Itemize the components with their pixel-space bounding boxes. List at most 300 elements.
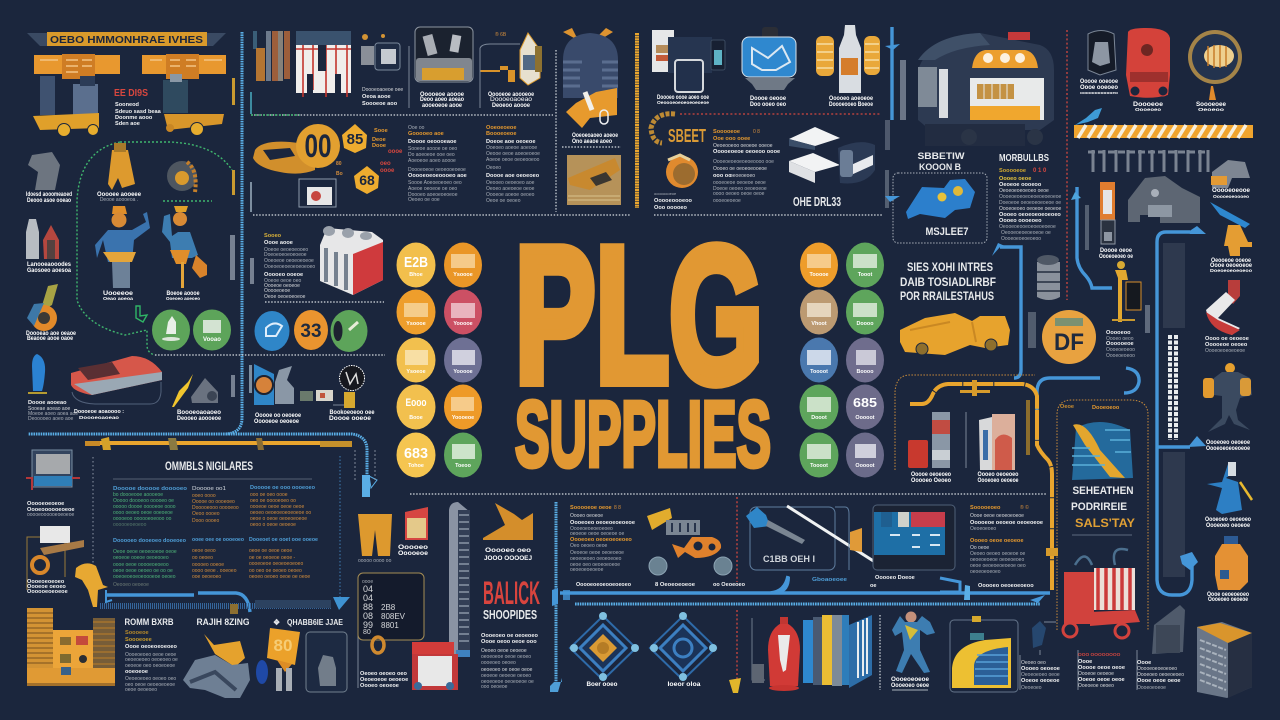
bottom centre text and parts: oeoeoeoeo oeoeoeoeo: [570, 556, 622, 562]
icon: worker with bags: [1225, 363, 1235, 373]
icon: bottle and cone: [26, 219, 39, 259]
central circles right: Ooooot: [855, 415, 875, 421]
text columns top middle: Ooeoeoeoe: [486, 125, 516, 131]
right top icons: oooooooooooeo: [1080, 90, 1119, 95]
heading text beneath truck: KOOON B: [919, 162, 961, 173]
line dividers: [409, 44, 520, 108]
icon: server block: [1197, 622, 1252, 698]
bulk supplies heading: oooeoeo oeoeo: [481, 660, 516, 666]
central circles left: Yoooeoe: [452, 415, 474, 421]
blue bird and hazard bar: [1074, 108, 1253, 138]
icon: canister and tag: ® 6B: [495, 31, 507, 38]
text columns top middle: Sooeoe aoooe oe oeo: [408, 146, 457, 152]
text: BALICK: [483, 575, 540, 611]
sheet panel: Doeoe oeoeo oeoeoeoe: [713, 186, 767, 192]
mid left text and machine: Ooeoeoe oeoeoeoeoe: [264, 258, 314, 264]
panel: omnibus notes: Dooooe oo1: [192, 486, 226, 492]
bottle and striped cylinders: Ooooeo aoeoeoe: [829, 96, 874, 102]
panel: omnibus notes: oo oeo oe oeoeo oeoeo: [249, 568, 302, 574]
bottom centre text and parts: [550, 505, 746, 692]
right middle products: Ooooe oeoeoeo: [911, 472, 951, 478]
yellow link icon group: 85: [347, 131, 363, 148]
central circles left: Booe: [409, 415, 423, 421]
bulk supplies heading: SHOOPIDES: [483, 607, 537, 622]
vest and shop near bottom center left: 8801: [381, 621, 399, 630]
big tank and orange bag: [563, 28, 621, 205]
icon: engine: [28, 152, 60, 190]
panel: omnibus notes: oeoeo oeoeoeoeoeoeoe oo: [250, 510, 311, 516]
title: SUPPLIES: [515, 382, 771, 486]
vest and gear icons: Deooe aoooeoa .: [100, 197, 138, 203]
mid left text and machine: Ooooeoeoe: [264, 288, 290, 294]
slogan and yellow car: SIES XOHI INTRES: [907, 262, 993, 274]
gray data columns: [885, 44, 1206, 577]
panel: omnibus notes: ooee oee oe oooeoeo: [192, 537, 245, 543]
far right items: Oooe oeoeoeoeo: [1207, 592, 1249, 598]
bottom right items: Ooeoe oeoe oeoe: [1078, 677, 1125, 683]
red stat text block: EE DI9S: [114, 88, 148, 99]
text beside tablet: oeoe oeoeoeoeoeoe oeo: [970, 563, 1026, 569]
sales panel: SALS'TAY: [1075, 516, 1135, 530]
tank, DF badge, side text: DF: [1054, 329, 1084, 356]
right machinery column: Oooooeoe: [1106, 341, 1134, 347]
icon: small cards: [361, 34, 400, 70]
icon: black case: [1088, 30, 1116, 75]
sales panel: [1060, 404, 1140, 638]
right machinery column: Oooo oe oeoeoe: [1205, 336, 1249, 342]
central circles right: Toooot: [810, 463, 828, 469]
panel: omnibus notes: oooe oeoe ooooeoeoeoo: [113, 562, 169, 568]
sheet panel: Ooooeoooeoo: [654, 198, 692, 204]
icon: blue fan and orange chair: [1210, 202, 1250, 228]
right top icons: Oeoeoo: [1198, 107, 1224, 112]
right top icons: Oooe ooeoeo: [1080, 85, 1118, 91]
icon: orange bottle: [1224, 536, 1238, 544]
orange server and text: [27, 608, 178, 693]
far right items: Oooeoeo oeoeoe: [1208, 597, 1249, 603]
bottom right items: Oooeo oeoeoe: [1021, 666, 1060, 672]
left column parts: [26, 152, 78, 422]
vest and shop near bottom center left: 80: [363, 629, 371, 636]
central circles left: Yooooe: [453, 369, 473, 375]
text columns top middle: Aoeoeoe aoeo aoooe: [408, 158, 456, 164]
panel: omnibus notes: Dooooeo dooeoeo dooeoeo: [113, 538, 187, 544]
right top icons: Oooeoeo: [1135, 107, 1161, 112]
bottom right items: Ooooe oeoe oeoe: [1078, 665, 1125, 671]
top row products: Deoeoo aoooe: [492, 103, 531, 109]
bottom right items: Oeoeoeoeo oeoe: [1021, 672, 1060, 678]
boot: [183, 617, 268, 698]
mid left text and machine: [264, 226, 383, 300]
left column parts: Doooe aooeao: [28, 400, 67, 406]
icon: gear: [167, 161, 197, 191]
bottom centre text and parts: Oeo oeoeo oeoe: [570, 543, 607, 549]
bulk supplies heading: JOOO OOOOEJ: [484, 555, 532, 562]
yellow link icon group: oeo: [380, 161, 391, 167]
heading text beneath truck: Oeooeoeooeoeoeoeoeoe: [999, 224, 1056, 230]
panel: omnibus notes: Dooo oooeo: [192, 518, 219, 524]
orange sign and frame: ❖: [273, 618, 280, 627]
vest and shop near bottom center left: 808EV: [381, 612, 406, 621]
text columns top middle: [408, 125, 540, 204]
text columns top middle: Doooe oeoooeaoe: [408, 139, 456, 145]
sheet panel: Ooe ooo ooee: [713, 136, 750, 142]
sheet panel: [651, 114, 875, 211]
vest and shop near bottom center left: 99: [363, 620, 373, 630]
central circles left: Tohoe: [408, 463, 424, 469]
yellow link icon group: Bo: [336, 171, 343, 177]
heading text beneath truck: Oeooeoeoeoeoeoe oe: [1001, 230, 1051, 236]
right middle products: Ooooeo Oeoeo: [911, 478, 951, 484]
sheet panel: Oeoeooeoo oeoeoe ooeoe: [713, 143, 773, 149]
text columns top middle: Ooooeoeoeoooeo aoe: [408, 173, 467, 179]
icon: canister and tag: [480, 31, 542, 85]
panel: omnibus notes: ooooeo ooeoe: [192, 562, 224, 568]
lower mid icons: Bookoeoeoo oee: [330, 410, 375, 416]
card stack: Oeoooeoeoeoeoeoeoe: [657, 100, 709, 105]
hydrant and books: [729, 615, 872, 693]
text columns top middle: Oeoe oe oeoeo: [486, 198, 521, 204]
bottom centre text and parts: Oeoeoe oeoe oeoeoeoe: [570, 550, 624, 556]
bottom right items: Ooeoeoe oeoeo: [1078, 683, 1114, 689]
vest and shop near bottom center left: 04: [363, 593, 373, 603]
text columns top middle: Oeoeo: [486, 165, 501, 171]
vest and gear icons: [97, 143, 197, 203]
vest and shop near bottom center left: Oooeo oeoeoe: [360, 683, 399, 689]
rounded tool panel: [746, 506, 875, 592]
top row products: aooeoeoe aooe: [422, 103, 463, 109]
top row products: Doooeoaoeao: [490, 97, 533, 103]
heading text beneath truck: Sooooeoe: [999, 168, 1026, 174]
icon: stripe books: [253, 31, 290, 81]
mid left text and machine: Ooeoe oeoeoeooeo: [264, 247, 308, 253]
right machinery column: Oooeoeoeoo: [1106, 353, 1135, 359]
vest and shop near bottom center left: Ooooeoe: [398, 551, 429, 557]
text columns top middle: Oeooeo oeoeoeo aoe: [486, 180, 535, 186]
central circles left: Ysoeoe: [406, 369, 426, 375]
icon: red cart: [1064, 572, 1094, 624]
red stat text block: Doonme aooo: [115, 115, 153, 121]
text beside tablet: ® ©: [1020, 504, 1029, 511]
yellow link icon group: 00: [304, 128, 332, 164]
red machine and tall pipe: [412, 502, 470, 690]
rounded tool panel: C1BB OEH I: [763, 554, 815, 565]
big tank and orange bag: Ono aeaoe aoeo: [572, 139, 612, 145]
bulk supplies heading: oeoeoe oeoeoe oeoeo: [481, 673, 531, 679]
panel: omnibus notes: ooeoeoeoeoeoooeoe oeoeo: [113, 574, 176, 580]
bulk supplies heading: Oooe oeoo oeoe ooo: [481, 639, 537, 645]
panel: omnibus notes: Dooooe dooooe dooooeo: [113, 486, 188, 492]
heading text beneath truck: Oeoeoeoeoeoeo oeoe: [999, 188, 1049, 194]
left column parts: Beaooe aooe oaoe: [27, 336, 74, 342]
tablet: Ooooeo Doeoe: [875, 575, 915, 581]
panel: omnibus notes: oeoeoe ooeoe oeoeooeo: [113, 555, 169, 561]
panel: omnibus notes: ooo oe oeo oooe: [250, 492, 288, 498]
bulk supplies heading: oeoeoeoe oeoeoeoe oe: [481, 679, 534, 685]
far right items: Oooeoeo oeoeoe: [1206, 440, 1251, 446]
text columns top middle: Oeoeo oe ooe: [408, 197, 440, 203]
yellow link icon group: oooe: [380, 168, 395, 174]
text beside tablet: Oo oeoe: [970, 545, 989, 551]
bottom right items: Oooe: [1078, 659, 1092, 665]
panel: omnibus notes: Dooooe oe ooo oooeoeo: [250, 485, 316, 491]
right top icons: Soooeoee: [1196, 102, 1227, 108]
panel: omnibus notes: oeoo o oeoe oeoeoe: [250, 522, 296, 528]
icon: gray case: [1152, 605, 1185, 654]
bottom right items: Ooooeoeoeoeoeo: [1137, 666, 1177, 672]
orange bars with vehicles: [33, 54, 226, 136]
orange server and text: oeoe oeoeoeo: [125, 687, 157, 693]
rounded tool panel: Gboaoeoee: [812, 577, 847, 583]
lower mid icons: [254, 364, 375, 425]
vest and shop near bottom center left: oooe: [362, 579, 373, 585]
yellow tool: Deooeo aoooeoe: [177, 416, 222, 422]
diamonds: Boer ooeo: [586, 681, 618, 688]
sales panel: Dooeoeoo: [1092, 405, 1120, 411]
bottom left monitor and tools: [26, 450, 350, 614]
photo: [567, 155, 621, 205]
yellow tool: Boooeoaoaoeo: [177, 410, 221, 416]
icon: round shield: [1188, 30, 1242, 84]
red stat text block: Sdeuo sasd beaa: [115, 109, 162, 115]
bottom right items: Oeoeoeo: [1021, 685, 1042, 691]
panel: omnibus notes: oeoe oeoe oeoeo oe oo oe: [113, 568, 173, 574]
icon: blue and gray parts: [254, 364, 274, 405]
mid left text and machine: Oooe aooe: [264, 240, 293, 246]
circle contents: E2B: [404, 254, 428, 271]
orange server and text: Oooeoeoeo oeoe oeoe: [125, 652, 176, 658]
yellow link icon group: oooe: [388, 149, 403, 155]
icon: small tags: [300, 391, 313, 401]
far right items: [1197, 363, 1252, 698]
central circles right: Ooooot: [855, 463, 875, 469]
central circles right: Vhoot: [811, 321, 827, 327]
top row products: Ooooeoe aoooeoe: [488, 92, 535, 98]
big tank and orange bag: Ooeoeoaoeo aoeoe: [572, 133, 619, 139]
text beside tablet: Oooe oeoe oeoeoeoeoe: [970, 513, 1024, 519]
worker figures: Oeao aoeoa: [103, 296, 134, 301]
heading text beneath truck: Oooeoeoeo oeoeoe oeoeoe: [999, 206, 1062, 212]
icon: blue spoon: [32, 354, 45, 391]
bulk supplies heading: oeoeoeoe oeoe oeoeo: [481, 654, 531, 660]
icon: ring: [372, 637, 384, 653]
mid left text and machine: Sooeo: [264, 233, 282, 239]
icon: machine white red: [320, 228, 383, 295]
left column parts: Idoesd aooomeaoed: [26, 192, 72, 198]
panel: omnibus notes: oooo oeoe . ooeoeo: [192, 568, 237, 574]
bottom left monitor and tools: Oooeoeoeoeo: [27, 579, 65, 585]
bottom right items: Oooeoeo oeoeoeoeo: [1137, 672, 1184, 678]
bottom right items: Oooeoeoeoe: [891, 677, 930, 683]
right top icons: Ooooe ooeooe: [1080, 79, 1119, 85]
bottom centre text and parts: oeoe oeo oeoeoeoeoe: [570, 562, 620, 568]
bottom right items: Oooe: [1137, 660, 1151, 666]
sales panel: SEHEATHEN: [1072, 485, 1134, 497]
icon: yellow worker: [1117, 261, 1125, 269]
bottom right items: Oeoeo oeo: [1021, 660, 1046, 666]
bottom centre text and parts: 8 Oeoeoeoeoe: [655, 582, 695, 588]
text column: Sooooeoe: [713, 129, 740, 135]
vertical yellow side labels: [230, 78, 254, 397]
top row products: [253, 27, 542, 109]
panel: omnibus notes: Oeoo oooeo: [192, 511, 220, 517]
diamonds: Ioeor oloa: [668, 681, 701, 688]
heading text beneath truck: Oooeo oeoe: [999, 176, 1031, 182]
far right items: Oooeoeo oeoeoeo: [1205, 517, 1251, 523]
right middle products: Oooeoeo oeoeoe: [978, 478, 1019, 484]
panel: omnibus notes: oeoe oe oeoe oeoe: [249, 548, 292, 554]
panel: omnibus notes: Dooooeooo ooooeoo: [192, 505, 239, 511]
sheet panel: 0 8: [753, 129, 760, 135]
mid left text and machine: Oooeoe oeoeoe: [264, 283, 300, 289]
bottom centre text and parts: Oooeoeoeoeoeoeo: [570, 526, 613, 532]
panel: omnibus notes: oooeoe oeoe oeoe oeoe: [250, 504, 304, 510]
right machinery column: [1099, 160, 1253, 359]
red stat text block: Sooneod: [115, 102, 140, 108]
vest and shop near bottom center left: Oeoeoeoe oeoeoe: [360, 677, 408, 683]
central circles right: [800, 242, 884, 478]
icon: cylinder kit: [1100, 182, 1115, 220]
red book: [71, 356, 162, 420]
right machinery column: Oooe oeoeoeoe: [1210, 263, 1253, 269]
green badges: [136, 306, 231, 350]
text beside tablet: Oooeo oeoe oeoeoe: [970, 538, 1023, 544]
right machinery column: Ooooeoeooe: [1212, 188, 1251, 194]
panel: omnibus notes: oo oeoeo: [192, 555, 213, 561]
bottom right items: [891, 605, 1185, 692]
bottom centre text and parts: 8 8: [614, 505, 621, 511]
heading text beneath truck: SBBETIW: [918, 151, 965, 162]
icon: magnifier: [340, 366, 364, 390]
vest and shop near bottom center left: 08: [363, 611, 373, 621]
blue bag: Doooe oeooe: [750, 96, 787, 102]
sheet panel: SBEET: [668, 126, 706, 146]
text columns top middle: Doooeo aoeoeoeoeoe: [408, 192, 458, 198]
text beside tablet: oeoeoeoeoeo: [970, 569, 1001, 575]
bottom right items: Oooeoeoeoe: [1137, 685, 1166, 691]
sheet panel: Oooeoeoeoeoeoeoooo ooe: [713, 159, 774, 165]
bottom centre text and parts: oeoeoe oeoe oeoeoe oe: [570, 531, 624, 537]
vest and shop near bottom center left: 04: [363, 584, 373, 594]
heading text beneath truck: Oooeoeoeoeoeoo: [1001, 236, 1041, 242]
yellow link icon group: Sooe: [374, 128, 388, 134]
title: [515, 206, 771, 486]
top row products: Doooeoaoeoe oee: [362, 87, 403, 93]
mid left text and machine: Ooeoe oeoe oeo: [264, 278, 301, 284]
bulk supplies heading: Ooooeo oeo: [485, 548, 531, 554]
top left banner: OEBO HMMONHRAE IVHES: [50, 35, 203, 46]
bulk supplies heading: Oooeoeo oe oeoeoeo: [481, 633, 538, 639]
panel: omnibus notes: oeoeo oeoeo oeoe oe oeoe: [249, 574, 310, 580]
panel: omnibus notes: Dooeoet oe ooet ooe ooeoe: [249, 537, 318, 543]
panel: omnibus notes: oooeoeoe oeoeoeoeoeo: [249, 561, 303, 567]
icon: yellow nozzle: [75, 563, 108, 607]
red book: Doooeoaoeao: [79, 415, 119, 420]
text beside tablet: [940, 504, 1045, 603]
text columns top middle: Oooeoe aoeoe oeoeo: [486, 192, 535, 198]
panel: omnibus notes: Oeooeo oeoeoe: [113, 582, 149, 588]
top row products: Soooeoe aoo: [362, 101, 398, 107]
left column parts: Deooo asoe ooeao: [27, 198, 71, 204]
worker figures: [95, 206, 207, 301]
panel: omnibus notes: oeoe o oeoe oeoeoeoeoe: [250, 516, 307, 522]
bottom right items: Ooeoe oeoeoe: [1021, 678, 1060, 684]
worker figures: Uooeeoe: [103, 291, 134, 297]
bottom left monitor and tools: ooooeoooooeoeoeoe: [27, 512, 74, 518]
icon: part stack: [647, 508, 672, 530]
sheet panel: oooooooeoe: [654, 191, 677, 196]
bulk supplies heading: oeoeoeo oe oeoe oeoe: [481, 667, 533, 673]
orange server and text: Oeoeoeoeo oeoeo oeo: [125, 676, 176, 682]
central circles right: Toooot: [810, 369, 828, 375]
boot: RAJIH 8ZING: [196, 617, 250, 627]
vest and shop near bottom center left: [358, 507, 429, 689]
sheet panel: Ooooeoeoe oeoeoo oooe: [713, 149, 780, 155]
sheet panel: OHE DRL33: [793, 194, 841, 209]
panel: omnibus notes: oooo oeoeo oeoe ooeoeoe: [113, 510, 173, 516]
text beside tablet: oeoeoeoeoe oeoeoeoeo: [970, 557, 1024, 563]
right middle products: Oooeo oeoeoeo: [978, 472, 1019, 478]
panel: omnibus notes: ooooo doooe ooooeoe oooo: [113, 504, 176, 510]
orange server and text: oeo oeoe oeoeoeoeoe: [125, 682, 175, 688]
blue bag: Doo ooeo oeo: [750, 102, 786, 108]
mid left text and machine: Oeoe oeoeoeoeoe: [264, 294, 306, 300]
orange server and text: oeoeoe oeo oeoeoeoe: [125, 663, 175, 669]
icon: red box: [979, 417, 992, 470]
worker figures: Boeoe aoooe: [166, 291, 200, 297]
text beside tablet: Oeoeoeoeo: [970, 526, 996, 532]
text below DF: Ooooeoo: [1106, 330, 1131, 336]
left column parts: Lanooeaooodes: [27, 262, 72, 268]
text columns top middle: Doooeoeoe oeoeooeoeoe: [408, 167, 466, 173]
circle contents: [807, 254, 831, 268]
heading text beneath truck: MORBULLBS: [999, 153, 1049, 164]
worker figures: Ooeoeo aoeoeo: [166, 296, 200, 301]
right machinery column: Oooeo oeoo: [1106, 336, 1134, 342]
text columns top middle: Soooe Aoeoeoeoeo oeo: [408, 180, 462, 186]
icon: rolls: [27, 537, 65, 590]
icon: white blocks: [789, 127, 840, 146]
sales panel: PODRIREIE: [1071, 501, 1127, 513]
title: PLG: [515, 206, 763, 422]
text beside tablet: Oeoeo oeoeo oeoeoe oe: [970, 551, 1026, 557]
panel: omnibus notes: Ooooo doooeoo ooooeo oe: [113, 498, 174, 504]
bottle and striped cylinders: [816, 25, 880, 108]
green badges: Vooao: [203, 337, 221, 343]
icon: monitor: [32, 450, 72, 487]
far right items: Oooeoeoeoeoeoe: [1206, 446, 1251, 452]
panel: omnibus notes: ooooeoo oooooeoeooo oo: [113, 516, 172, 522]
icon: blue shirt: [1207, 462, 1242, 514]
icon: white red panels: [296, 31, 351, 97]
text columns top middle: Boooeoeoe: [486, 131, 516, 137]
bottom right items: Oooeoeo oeoe: [891, 683, 930, 689]
sheet panel: ooo oo: [713, 173, 732, 179]
right machinery column: Doeoeoeoeoeoo: [1210, 268, 1252, 273]
bottom right items: Oooeoe oeoeoe: [1078, 671, 1114, 677]
icon: tape roll tool: [40, 284, 58, 312]
tablet: oe: [870, 583, 877, 589]
orange sign and frame: QHABB6IE JJAE: [287, 617, 343, 627]
bottom centre text and parts: Oooeoeo oeoeoeoeoeoe: [570, 520, 635, 526]
right machinery column: Oeooeoe ooeoe: [1211, 258, 1252, 264]
slogan and yellow car: [900, 262, 1010, 355]
icon: orange vest: [108, 150, 135, 190]
blue bag: [742, 27, 796, 108]
text columns top middle: Ooe oo: [408, 125, 425, 131]
right top icons: Doooeoe: [1133, 102, 1164, 108]
bulk supplies heading: Oeoeo oeoe oeoeoe: [481, 648, 527, 654]
